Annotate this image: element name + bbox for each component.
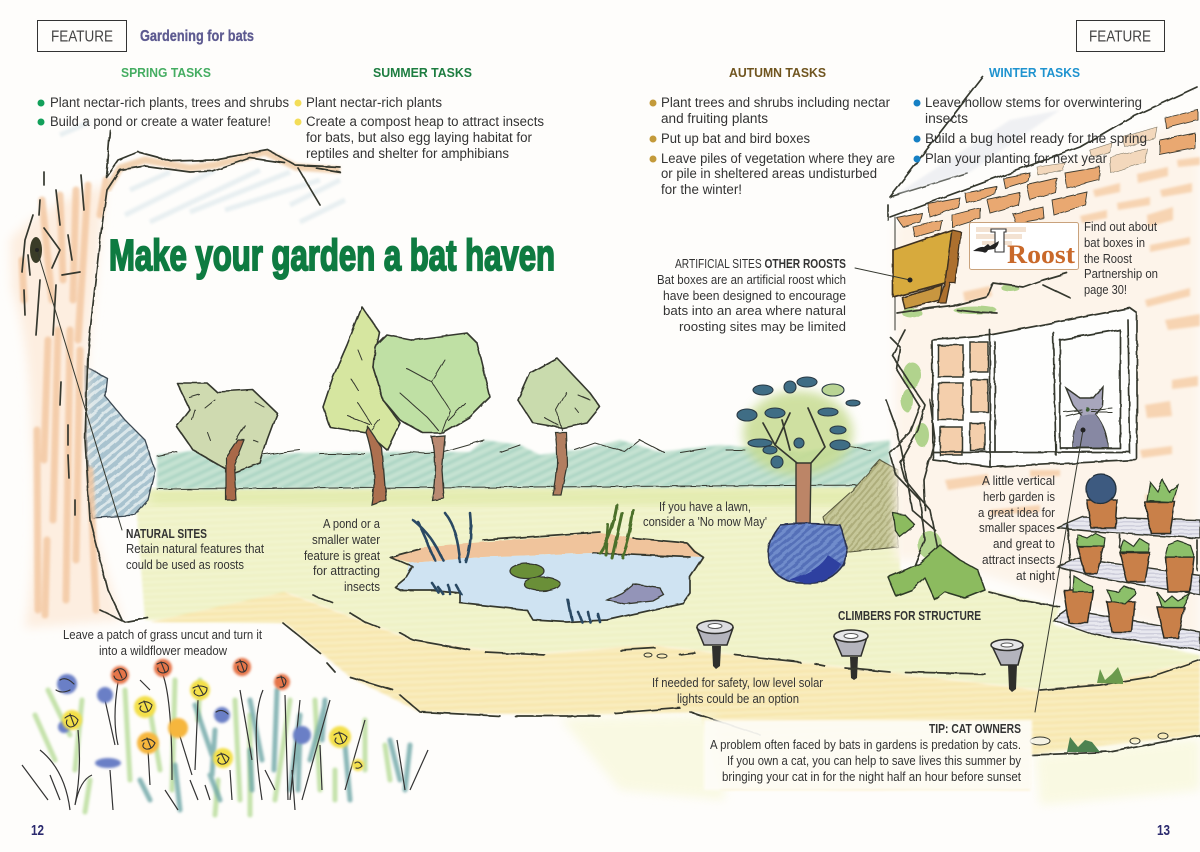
shelf boards (1053, 517, 1200, 650)
wall wash (895, 115, 1200, 640)
logo box icon (991, 229, 1006, 252)
summer tasks: for bats, but also egg laying habitat for (306, 130, 532, 145)
callout: natural sites: Retain natural features that (126, 541, 264, 556)
trunk colouring (10, 185, 122, 628)
callout: other roosts: have been designed to encourage (663, 288, 846, 303)
callout: natural sites (126, 526, 264, 572)
potted tree (737, 377, 860, 528)
autumn tasks: Plant trees and shrubs including nectar (661, 95, 890, 110)
callout: herb garden: and great to (993, 536, 1055, 551)
callout: roost partnership: Partnership on (1084, 266, 1158, 281)
feature tag left: FEATURE (51, 28, 113, 46)
autumn tasks: Put up bat and bird boxes (661, 131, 810, 146)
callout: cat owners tip (710, 721, 1021, 784)
pale outlined bricks (1037, 127, 1157, 175)
feature tag left (38, 20, 126, 52)
trunk (796, 463, 811, 528)
spring tasks: SPRING TASKS (121, 65, 211, 80)
roof (888, 77, 1197, 220)
water outline (390, 532, 703, 622)
lawn (135, 486, 1200, 690)
callout: no mow may: consider a 'No mow May' (643, 514, 767, 529)
winter tasks: Leave hollow stems for overwintering (925, 95, 1142, 110)
posts (1068, 525, 1197, 590)
winter tasks: insects (925, 111, 968, 126)
wall edge (894, 217, 896, 330)
patio and path (150, 592, 1200, 790)
tall tree (323, 307, 400, 505)
callout: no mow may (643, 499, 767, 529)
blue pot (768, 524, 846, 583)
callout: herb garden: at night (1016, 568, 1055, 583)
page number right: 13 (1157, 822, 1170, 839)
callout: natural sites: could be used as roosts (126, 557, 244, 572)
bat box (893, 230, 961, 309)
callout: other roosts: bats into an area where natural (663, 303, 846, 318)
plants (1086, 474, 1116, 504)
solar light one (697, 620, 733, 669)
blue hedge behind the tree (85, 366, 155, 518)
callout: cat owners tip: If you own a cat, you can help to save lives this summer by (727, 753, 1021, 768)
callout: herb garden: a great idea for (978, 505, 1056, 520)
pale bricks (945, 157, 1200, 515)
autumn tasks: AUTUMN TASKS (729, 65, 826, 80)
trunk outline and branch (85, 130, 340, 622)
branches (763, 408, 825, 463)
climber stems (897, 273, 1070, 313)
meadow blue blooms (57, 674, 311, 768)
lawn strong edge (150, 489, 890, 505)
branch colouring (107, 152, 340, 190)
callout: no mow may: If you have a lawn, (659, 499, 751, 514)
small tree (177, 383, 277, 500)
bark streaks (22, 180, 106, 615)
window (932, 308, 1137, 467)
meadow bloom ink (56, 660, 362, 768)
callout: herb garden: A little vertical (982, 473, 1055, 488)
reeds (413, 513, 600, 622)
climber leaves (901, 285, 1019, 559)
callout: pond: smaller water (312, 532, 381, 547)
callout: other roosts: Bat boxes are an artificial roost which (657, 272, 846, 287)
logo bricks (976, 227, 1026, 245)
house wall (888, 77, 1200, 640)
shrub (823, 460, 898, 552)
wildflower meadow (22, 658, 428, 815)
callout: pond: A pond or a (323, 516, 381, 531)
meadow red blooms (111, 658, 290, 690)
leaves (737, 377, 860, 468)
outlined bricks (897, 110, 1198, 237)
callout: herb garden: herb garden is (983, 489, 1055, 504)
winter tasks: Plan your planting for next year (925, 151, 1107, 166)
path edge lines (283, 592, 1200, 755)
callout: pond: feature is great (304, 548, 380, 563)
lily pads (510, 564, 544, 578)
callout: solar lights: If needed for safety, low level solar (652, 675, 824, 690)
cat in window (1064, 387, 1112, 447)
callout: roost partnership: the Roost (1084, 251, 1132, 266)
autumn tasks: and fruiting plants (661, 111, 768, 126)
callout: cat owners tip: bringing your cat in for the night half an hour before sunset (722, 769, 1021, 784)
small leaf (893, 513, 915, 537)
large tree at left (10, 130, 340, 628)
callout: other roosts (657, 256, 846, 334)
pots (1064, 500, 1194, 638)
winter tasks: WINTER TASKS (989, 65, 1080, 80)
callout: roost partnership: Find out about (1084, 219, 1157, 234)
callout: herb garden: smaller spaces (979, 520, 1055, 535)
autumn tasks: Leave piles of vegetation where they are (661, 151, 895, 166)
autumn tasks: for the winter! (661, 182, 742, 197)
callout: pond (304, 516, 381, 594)
roof shading (895, 110, 1060, 195)
leader line: bat box (855, 268, 912, 282)
water (395, 553, 703, 622)
summer tasks: Plant nectar-rich plants (306, 95, 442, 110)
callout: wildflower meadow: into a wildflower meadow (99, 643, 228, 658)
earth bank (390, 533, 703, 563)
feature tag right (1076, 20, 1164, 52)
solar light three (991, 640, 1023, 692)
callout: wildflower meadow: Leave a patch of grass uncut and turn it (63, 627, 262, 642)
meadow teal grass (140, 690, 410, 810)
callout: other roosts: ARTIFICIAL SITES OTHER ROOSTS (675, 256, 846, 271)
stone (607, 584, 664, 604)
callout: climbers: CLIMBERS FOR STRUCTURE (838, 608, 981, 623)
summer tasks: reptiles and shelter for amphibians (306, 146, 509, 161)
path pebbles and tufts (644, 653, 1168, 752)
callout: roost partnership (1084, 219, 1158, 297)
winter tasks (914, 65, 1147, 166)
meadow ink stems (22, 675, 428, 810)
summer tasks: SUMMER TASKS (373, 65, 472, 80)
callout: pond: insects (344, 579, 380, 594)
foliage wash (743, 391, 853, 475)
callout: roost partnership: bat boxes in (1084, 235, 1145, 250)
callout: solar lights: lights could be an option (677, 691, 799, 706)
callout: pond: for attracting (313, 563, 380, 578)
tree hollow (30, 237, 42, 263)
autumn tasks: or pile in sheltered areas undisturbed (661, 166, 877, 181)
logo wordmark: Roost (1007, 240, 1075, 269)
page number left: 12 (31, 822, 44, 839)
pond (390, 505, 703, 622)
meadow orange blooms (137, 718, 188, 754)
bark marks (22, 172, 84, 515)
feature tag right: FEATURE (1089, 28, 1151, 46)
Roost logo (970, 222, 1078, 270)
summer tasks (294, 65, 544, 161)
spring tasks (38, 65, 289, 129)
callout: other roosts: roosting sites may be limited (679, 319, 846, 334)
plant shelves (1053, 474, 1200, 650)
spring tasks: Plant nectar-rich plants, trees and shrubs (50, 95, 289, 110)
callout: herb garden (978, 473, 1056, 583)
summer tasks: Create a compost heap to attract insects (306, 114, 544, 129)
callout: cat owners tip: TIP: CAT OWNERS (929, 721, 1021, 736)
meadow pale grass (35, 680, 390, 815)
climber plant (886, 273, 1070, 600)
meadow yellow blooms (62, 680, 364, 771)
autumn tasks (650, 65, 895, 197)
pale panel behind cat tip (704, 720, 1032, 790)
callout: solar lights (652, 675, 824, 706)
large leaf (888, 545, 985, 600)
sky pencil hatching (60, 122, 345, 222)
callout: herb garden: attract insects (982, 552, 1055, 567)
broad tree (373, 333, 490, 500)
leader line: natural sites (35, 248, 122, 530)
callout: natural sites: NATURAL SITES (126, 526, 207, 541)
logo bat icon (973, 241, 999, 253)
distant hedge (157, 440, 890, 489)
callout: cat owners tip: A problem often faced by bats in gardens is predation by cats. (710, 737, 1021, 752)
winter tasks: Build a bug hotel ready for the spring (925, 131, 1147, 146)
main title: Make your garden a bat haven (109, 231, 555, 280)
pale ground at front (560, 715, 1200, 805)
spring tasks: Build a pond or create a water feature! (50, 114, 271, 129)
callout: roost partnership: page 30! (1084, 282, 1127, 297)
round tree (518, 358, 600, 495)
leader line: cat (1035, 428, 1086, 712)
section label: Gardening for bats (140, 28, 254, 45)
callout: wildflower meadow (63, 627, 262, 658)
solar light two (834, 630, 868, 680)
